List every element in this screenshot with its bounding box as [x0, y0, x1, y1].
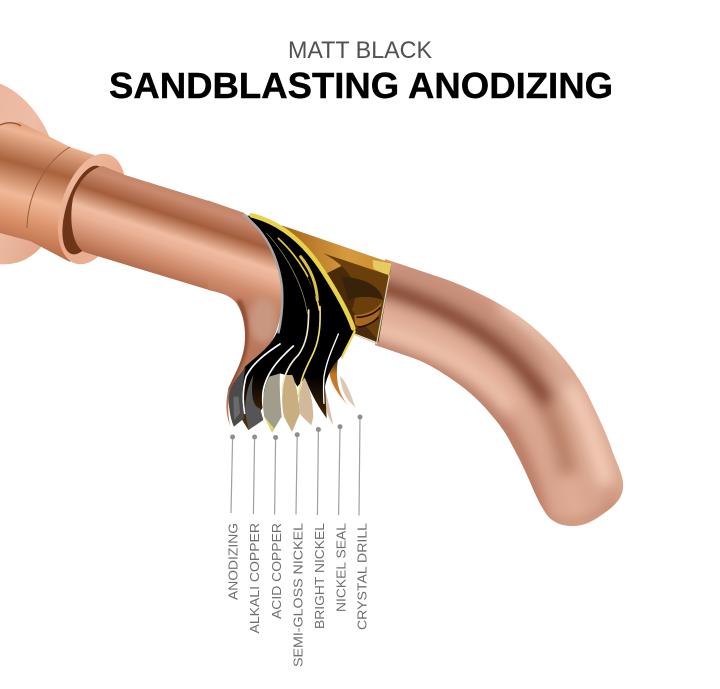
label: alkali copper: ALKALI COPPER	[248, 523, 262, 634]
peeled tips far right	[325, 357, 355, 425]
layer leader lines	[230, 414, 362, 516]
curved right tube section	[375, 259, 624, 526]
first barrel	[0, 122, 115, 262]
label: crystal drill: CRYSTAL DRILL	[356, 523, 370, 630]
collar ring	[46, 145, 138, 273]
title: sandblasting anodizing: SANDBLASTING ANODIZING	[109, 65, 613, 106]
subtitle: matt black: MATT BLACK	[288, 37, 432, 64]
black layer mass	[230, 215, 355, 430]
exposed copper lobe	[208, 200, 282, 427]
gold window	[282, 225, 392, 343]
layer separators	[243, 307, 355, 423]
label: semi-gloss nickel: SEMI-GLOSS NICKEL	[292, 523, 306, 667]
wall plate	[0, 64, 80, 280]
left tube section	[71, 166, 209, 290]
faucet spout illustration	[0, 84, 624, 526]
label: bright nickel: BRIGHT NICKEL	[313, 523, 327, 629]
label: acid copper: ACID COPPER	[270, 523, 284, 619]
yellow streaks	[252, 215, 353, 328]
label: nickel seal: NICKEL SEAL	[334, 523, 348, 612]
layer tips	[229, 367, 313, 433]
label: anodizing: ANODIZING	[226, 523, 240, 600]
cutaway plating layers	[208, 200, 392, 433]
layer labels	[226, 523, 370, 667]
silver edge	[243, 215, 282, 333]
